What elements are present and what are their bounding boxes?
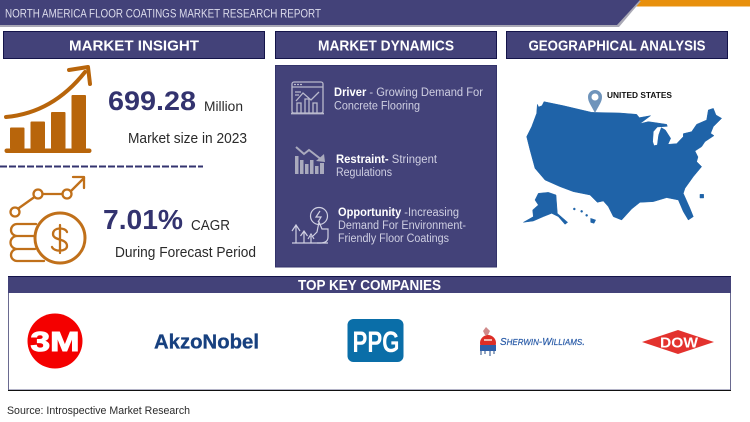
- dashed divider: [0, 166, 203, 168]
- icon: growth bar chart: [4, 67, 92, 153]
- restraint text: Regulations: [336, 167, 392, 179]
- logo: Dow: [642, 330, 714, 354]
- heading: market insight: MARKET INSIGHT: [69, 38, 199, 54]
- logo: AkzoNobel: AkzoNobel: [154, 332, 259, 354]
- report title: NORTH AMERICA FLOOR COATINGS MARKET RESEARCH REPORT: [5, 8, 321, 20]
- Puerto Rico: [700, 194, 704, 198]
- restraint text: [336, 154, 438, 179]
- logo: PPG: PPG: [352, 326, 400, 359]
- CAGR value: CAGR: [191, 218, 230, 234]
- opportunity text: Demand For Environment-: [338, 220, 466, 232]
- top banner: [0, 0, 750, 27]
- logo: Dow: DOW: [660, 334, 699, 352]
- market size value: 699.28: [108, 86, 196, 116]
- icon: opportunity hand and arrows: [292, 208, 328, 243]
- CAGR value: 7.01%: [103, 204, 183, 235]
- logo: 3M: [28, 314, 82, 368]
- Hawaii: [573, 208, 596, 223]
- restraint text: Restraint- Stringent: [336, 154, 438, 166]
- logo: Sherwin-Williams: SHERWIN-WILLIAMS.: [500, 336, 585, 348]
- logo: PPG: [348, 319, 404, 362]
- heading: geographical analysis: [506, 32, 728, 58]
- icon: restraint declining chart: [295, 147, 325, 174]
- market size value: Million: [204, 98, 243, 114]
- driver text: Concrete Flooring: [334, 100, 420, 112]
- opportunity text: [338, 207, 466, 245]
- companies heading: TOP KEY COMPANIES: [298, 278, 441, 294]
- opportunity text: Friendly Floor Coatings: [338, 233, 449, 245]
- heading: market dynamics: [276, 32, 496, 58]
- driver text: Driver - Growing Demand For: [334, 87, 483, 99]
- heading: geographical analysis: GEOGRAPHICAL ANALYSIS: [528, 38, 706, 54]
- panel: market dynamics: [276, 66, 496, 267]
- market size value: [108, 86, 247, 147]
- CAGR value: [103, 204, 256, 261]
- Alaska: [523, 192, 568, 224]
- opportunity text: Opportunity -Increasing: [338, 207, 459, 219]
- CAGR value: During Forecast Period: [115, 245, 256, 261]
- icon: driver dashboard: [291, 82, 324, 114]
- heading: market dynamics: MARKET DYNAMICS: [318, 38, 454, 54]
- logo: Sherwin-Williams: [480, 327, 585, 356]
- icon: map pin: [588, 90, 602, 113]
- icon: coins with growth arrow: [10, 177, 85, 263]
- map label: UNITED STATES: [607, 90, 672, 100]
- heading: market insight: [4, 32, 264, 58]
- map: United States: [523, 102, 722, 224]
- logo: 3M: 3M: [30, 326, 80, 357]
- source note: Source: Introspective Market Research: [7, 405, 190, 417]
- market size value: Market size in 2023: [128, 131, 247, 147]
- panel: top key companies: [8, 276, 731, 390]
- driver text: [334, 87, 483, 112]
